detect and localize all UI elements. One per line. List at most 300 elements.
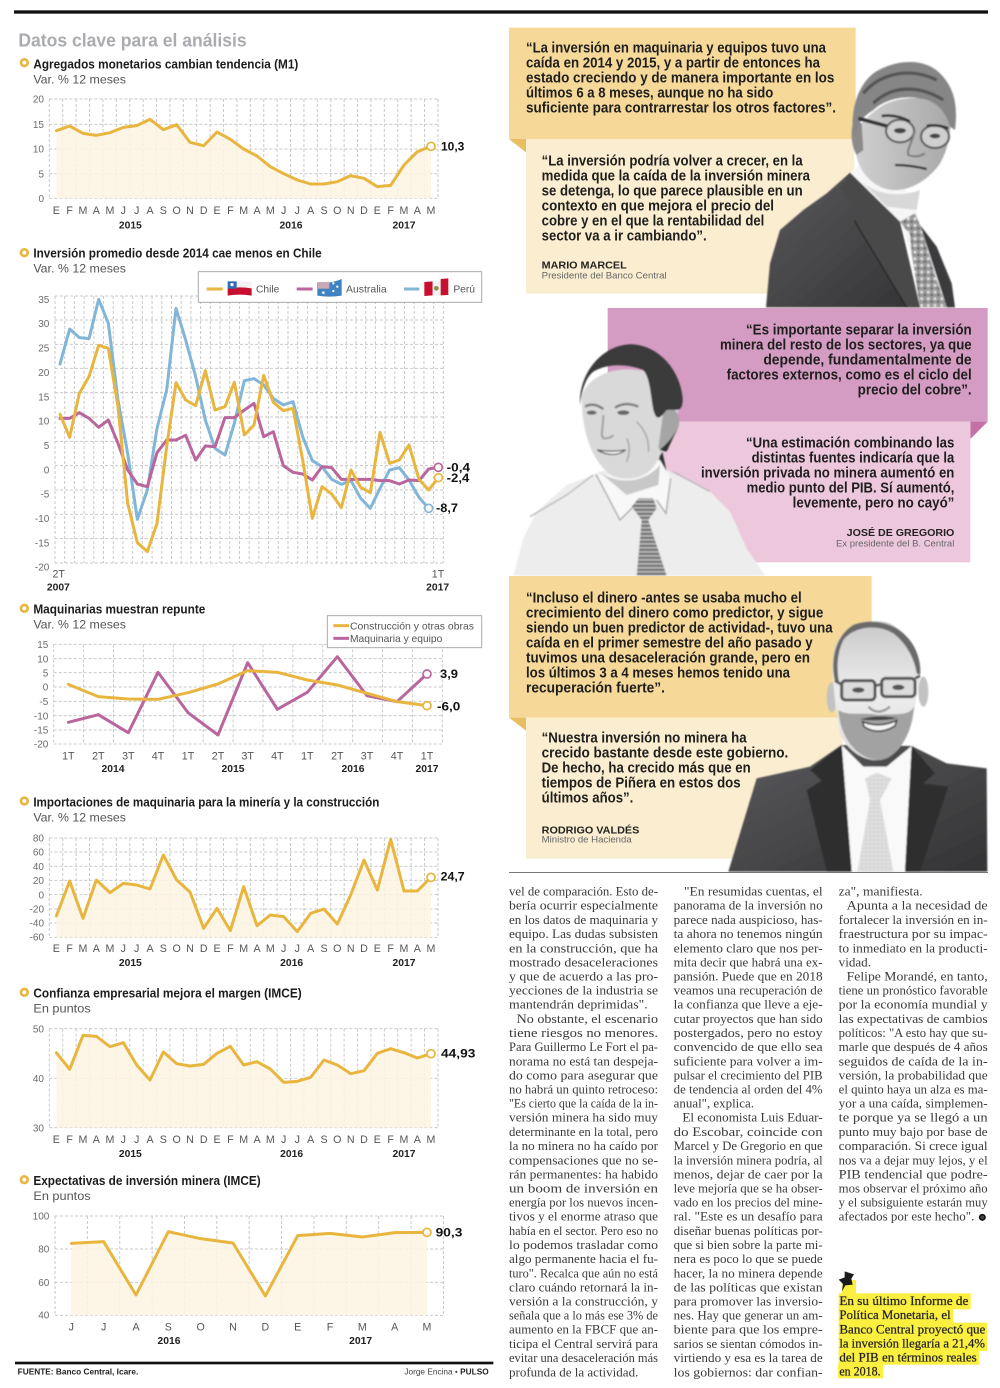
quote two: cobre y en el que la rentabilidad del bbox=[542, 214, 764, 230]
text column two: cutar proyectos que han sido bbox=[674, 1012, 823, 1026]
x axis labels: 4T bbox=[391, 750, 404, 762]
chart bullet bbox=[21, 59, 28, 66]
y axis labels: -5 bbox=[40, 490, 50, 501]
quote box dark bbox=[608, 308, 988, 422]
text column one: tivos y el enorme atraso que bbox=[509, 1210, 658, 1224]
text column three: vidad. bbox=[839, 955, 871, 969]
chart subtitle: Var. % 12 meses bbox=[33, 811, 126, 825]
text column one: determinante en la total, pero bbox=[509, 1125, 658, 1139]
text column three: nos va a dejar muy lejos, y el bbox=[839, 1153, 988, 1167]
text column three: punto muy bajo por base de bbox=[839, 1125, 988, 1139]
text column two: de las políticas que existan bbox=[674, 1280, 823, 1294]
y axis labels: 30 bbox=[38, 319, 50, 330]
x axis labels: 2T bbox=[212, 750, 225, 762]
y axis labels: 40 bbox=[38, 1311, 50, 1322]
attribution bbox=[836, 526, 955, 549]
y axis labels: -5 bbox=[39, 697, 49, 708]
x axis labels: EFMAMJJASONDEFMAMJJASONDEFMAM bbox=[53, 205, 435, 217]
end marker Australia bbox=[434, 463, 442, 471]
quote two: distintas fuentes indicaría que la bbox=[752, 451, 955, 467]
text column two: veamos una recuperación de bbox=[674, 984, 823, 998]
attribution: JOSÉ DE GREGORIO bbox=[847, 526, 955, 539]
legend key: Perú: Perú bbox=[453, 284, 475, 295]
quote two: “Nuestra inversión no minera ha bbox=[542, 730, 748, 746]
end value Perú: -8,7 bbox=[436, 501, 458, 515]
year labels bbox=[119, 958, 416, 969]
y axis labels: 5 bbox=[44, 441, 50, 452]
note text: En su último Informe de bbox=[839, 1294, 969, 1308]
x axis labels: 1T bbox=[432, 568, 445, 580]
year labels: 2017 bbox=[393, 221, 416, 232]
text column two: hacer, la no minera depende bbox=[674, 1266, 823, 1280]
end value: 24,7 bbox=[441, 870, 465, 884]
quote one bbox=[526, 40, 836, 116]
end-of-article mark bbox=[980, 1215, 985, 1220]
quote one: minera del resto de los sectores, ya que bbox=[720, 337, 972, 353]
text column one: compensaciones que no se- bbox=[509, 1153, 658, 1167]
text column two: que si bien sobre la parte mi- bbox=[674, 1238, 823, 1252]
y axis labels: 10 bbox=[38, 417, 50, 428]
text column one: claro cuándo retornará la in- bbox=[509, 1280, 658, 1294]
text column two: Marcel y De Gregorio en que bbox=[674, 1139, 823, 1153]
text column one: Para Guillermo Le Fort el pa- bbox=[509, 1040, 658, 1054]
area fill bbox=[71, 1232, 427, 1315]
text column three: versión, la probabilidad que bbox=[839, 1068, 988, 1082]
text column three: y el subsiguiente estarán muy bbox=[839, 1196, 988, 1210]
line: Chile bbox=[60, 345, 438, 552]
chart title: Importaciones de maquinaria para la minería y la construcción bbox=[33, 795, 379, 810]
attribution: Ministro de Hacienda bbox=[542, 834, 632, 844]
text column three: Felipe Morandé, en tanto, bbox=[847, 969, 988, 983]
quote one: “Incluso el dinero -antes se usaba mucho el bbox=[526, 591, 802, 607]
quote one: estado creciendo y de manera importante en los bbox=[526, 70, 834, 86]
top rule bbox=[14, 10, 988, 14]
y axis labels: 0 bbox=[38, 890, 44, 901]
legend key: Chile: Chile bbox=[256, 284, 280, 295]
y axis labels: -10 bbox=[35, 514, 50, 525]
panel: José De Gregorio quotes bbox=[608, 308, 988, 562]
text column two: anual", explica. bbox=[674, 1097, 754, 1111]
text column three: el quinto haya un alza es ma- bbox=[839, 1083, 988, 1097]
text column one: energía por los nuevos incen- bbox=[509, 1196, 658, 1210]
main heading: Datos clave para el análisis bbox=[18, 31, 247, 51]
y axis labels: 20 bbox=[33, 95, 44, 106]
quote two: sector va a ir cambiando”. bbox=[542, 229, 707, 245]
y axis labels: 15 bbox=[33, 120, 44, 131]
text column one: y que de acuerdo a las pro- bbox=[509, 969, 658, 983]
chart bullet bbox=[21, 989, 28, 996]
text column three: to inmediato en la producti- bbox=[839, 941, 988, 955]
text column two: parece nada auspicioso, has- bbox=[674, 913, 823, 927]
text column one: algo permanente hacia el fu- bbox=[509, 1252, 658, 1266]
note text: del PIB en términos reales bbox=[839, 1351, 977, 1365]
year labels: 2016 bbox=[280, 221, 303, 232]
chart bullet bbox=[21, 1176, 28, 1183]
quote one: últimos 6 a 8 meses, aunque no ha sido bbox=[526, 85, 774, 101]
year labels: 2017 bbox=[393, 1149, 416, 1160]
fold triangle bbox=[970, 422, 988, 439]
year labels bbox=[102, 764, 439, 775]
text column two: para promover las inversio- bbox=[674, 1295, 823, 1309]
quote two: se detenga, lo que parece plausible en un bbox=[542, 184, 803, 200]
y axis labels: 80 bbox=[33, 833, 44, 844]
text column one: no habrá un quinto retroceso: bbox=[509, 1083, 658, 1097]
quote two: últimos años”. bbox=[542, 790, 633, 806]
year labels: 2014 bbox=[102, 764, 125, 775]
chart subtitle: Var. % 12 meses bbox=[33, 262, 126, 276]
end value: 90,3 bbox=[436, 1226, 463, 1240]
quote two: tiempos de Piñera en estos dos bbox=[542, 775, 741, 791]
quote one: tuvimos una desaceleración grande, pero en bbox=[526, 651, 810, 667]
quote one: caída en 2014 y 2015, y a partir de entonces ha bbox=[526, 55, 821, 71]
chart: inversión promedio bbox=[21, 245, 482, 594]
x axis labels: 2T bbox=[331, 750, 344, 762]
chart bullet bbox=[21, 605, 28, 612]
x axis labels: 2T bbox=[52, 568, 65, 580]
x axis labels bbox=[47, 568, 449, 594]
quote two: contexto en que mejora el precio del bbox=[542, 199, 774, 215]
x axis labels: 4T bbox=[271, 750, 284, 762]
end marker Chile bbox=[434, 474, 442, 482]
quote two bbox=[542, 154, 811, 245]
data line bbox=[56, 1035, 431, 1082]
attribution: Presidente del Banco Central bbox=[542, 270, 667, 280]
text column one: en los datos de maquinaria y bbox=[509, 913, 659, 927]
text column two: de tendencia al orden del 4% bbox=[674, 1083, 823, 1097]
y axis labels: 100 bbox=[33, 1212, 50, 1223]
text column one: versión minera ha sido muy bbox=[509, 1111, 659, 1125]
end marker bbox=[423, 1228, 431, 1236]
quote box light bbox=[657, 422, 970, 562]
x axis labels: 3T bbox=[241, 750, 254, 762]
line: Perú bbox=[60, 299, 429, 519]
text column two: suficiente para volver a im- bbox=[674, 1054, 823, 1068]
x axis labels: 2017 bbox=[426, 583, 449, 594]
quote one bbox=[526, 591, 834, 697]
y axis labels: -20 bbox=[30, 905, 44, 916]
text column three: por la economía mundial y bbox=[839, 998, 988, 1012]
quote two: “La inversión podría volver a crecer, en la bbox=[542, 154, 804, 170]
quote one: “La inversión en maquinaria y equipos tuvo una bbox=[526, 40, 827, 56]
portrait: José De Gregorio bbox=[513, 344, 765, 576]
footer bbox=[15, 1362, 493, 1376]
text column three: Apunta a la necesidad de bbox=[847, 899, 988, 913]
y axis labels: 0 bbox=[44, 465, 50, 476]
y axis labels: 10 bbox=[37, 654, 49, 665]
credit: Jorge Encina • PULSO bbox=[404, 1366, 489, 1376]
text column one: un boom de inversión en bbox=[509, 1181, 659, 1195]
y axis labels: 30 bbox=[33, 1123, 44, 1134]
text column one: turo". Recalca que aún no está bbox=[509, 1266, 658, 1280]
text column three: yor a una caída, simplemen- bbox=[839, 1097, 988, 1111]
chart title: Agregados monetarios cambian tendencia (M1) bbox=[33, 56, 298, 71]
y axis labels: -10 bbox=[34, 711, 49, 722]
y axis labels: 80 bbox=[38, 1245, 50, 1256]
x axis labels: 1T bbox=[182, 750, 195, 762]
data line bbox=[56, 839, 431, 932]
text column one: en la construcción, que ha bbox=[509, 941, 658, 955]
icon: push pin bbox=[839, 1271, 854, 1291]
x axis labels: 2T bbox=[92, 750, 105, 762]
text column three: seguidos de caída de la in- bbox=[839, 1054, 988, 1068]
text column three: afectados por este hecho". bbox=[839, 1210, 974, 1224]
text column one: mantendrán deprimidas". bbox=[509, 998, 648, 1012]
quote two: “Una estimación combinando las bbox=[746, 436, 954, 452]
attribution bbox=[542, 823, 640, 844]
text column three: políticos: "A esto hay que su- bbox=[839, 1026, 988, 1040]
y axis labels: -60 bbox=[30, 933, 44, 944]
text column three: za", manifiesta. bbox=[839, 885, 923, 899]
area fill bbox=[56, 119, 431, 198]
text column three: PIB tendencial que podre- bbox=[839, 1167, 988, 1181]
quote one: depende, fundamentalmente de bbox=[763, 352, 972, 368]
text column two: elemento claro que nos per- bbox=[674, 941, 823, 955]
text column one: mostrado desaceleraciones bbox=[509, 955, 658, 969]
y axis labels: 10 bbox=[33, 145, 44, 156]
quote two: levemente, pero no cayó” bbox=[793, 496, 954, 512]
quote one: “Es importante separar la inversión bbox=[746, 322, 972, 338]
end marker bbox=[427, 1050, 435, 1058]
y axis labels: 50 bbox=[33, 1024, 44, 1035]
text column two: biente para que los empre- bbox=[674, 1323, 823, 1337]
text column three: fraestructura por su impac- bbox=[839, 927, 988, 941]
text column three bbox=[839, 885, 988, 1224]
text column one: do como para asegurar que bbox=[509, 1068, 658, 1082]
legend key: Perú bbox=[404, 278, 475, 296]
x axis labels: 4T bbox=[152, 750, 165, 762]
chart title: Confianza empresarial mejora el margen (IMCE) bbox=[33, 985, 302, 1000]
divider above article bbox=[509, 872, 988, 873]
chart: confianza empresarial bbox=[21, 985, 476, 1160]
y axis labels: 40 bbox=[33, 1074, 44, 1085]
quote box dark bbox=[509, 576, 872, 718]
text column one: lo podemos trasladar como bbox=[509, 1238, 658, 1252]
text column two: convencido de que ello sea bbox=[674, 1040, 823, 1054]
quote one: factores externos, como es el ciclo del bbox=[727, 367, 972, 383]
chart title: Maquinarias muestran repunte bbox=[33, 601, 205, 616]
text column one: señala que a lo más ese 3% de bbox=[509, 1309, 658, 1323]
text column two: mita decir que habrá una ex- bbox=[674, 955, 823, 969]
text column one: aumento en la FBCF que an- bbox=[509, 1323, 658, 1337]
text column one: versión a la construcción, y bbox=[509, 1295, 659, 1309]
line: maquinaria y equipo bbox=[68, 657, 427, 735]
text column two: pansión. Puede que en 2018 bbox=[674, 969, 823, 983]
x axis labels: JJASONDEFMAM bbox=[69, 1322, 431, 1334]
text column one: profunda de la actividad. bbox=[509, 1365, 638, 1379]
note text: Política Monetaria, el bbox=[839, 1308, 951, 1322]
text column two: pulsar el crecimiento del PIB bbox=[674, 1068, 823, 1082]
y axis labels bbox=[30, 833, 44, 944]
end marker bbox=[427, 142, 435, 150]
end value: 44,93 bbox=[441, 1047, 476, 1061]
attribution: MARIO MARCEL bbox=[542, 260, 627, 271]
text column two: vado en los precios del mine- bbox=[674, 1196, 823, 1210]
text column one: yecciones de la industria se bbox=[509, 984, 658, 998]
x axis labels: 1T bbox=[62, 750, 75, 762]
end value Australia: -0,4 bbox=[447, 461, 470, 475]
text column two: panorama de la inversión no bbox=[674, 899, 823, 913]
end value construcción: -6,0 bbox=[437, 700, 461, 714]
source note: FUENTE: Banco Central, Icare. bbox=[18, 1366, 138, 1376]
year labels: 2017 bbox=[416, 764, 439, 775]
note text: la inversión llegaría a 21,4% bbox=[839, 1336, 985, 1350]
legend: Maquinaria y equipo bbox=[350, 634, 443, 645]
text column two: nes. Hay que generar un am- bbox=[674, 1309, 823, 1323]
chart subtitle: En puntos bbox=[33, 1001, 91, 1015]
callout: highlighted note bbox=[838, 1271, 987, 1379]
text column three: mos observar el próximo año bbox=[839, 1181, 988, 1195]
text column two: sarios se sientan cómodos in- bbox=[674, 1337, 823, 1351]
y axis labels bbox=[33, 95, 44, 205]
y axis labels: 35 bbox=[38, 295, 50, 306]
text column three: fortalecer la inversión en in- bbox=[839, 913, 988, 927]
attribution: RODRIGO VALDÉS bbox=[542, 823, 640, 836]
x axis labels: 3T bbox=[361, 750, 374, 762]
text column two: la inversión minera podría, al bbox=[674, 1153, 823, 1167]
x axis labels: 3T bbox=[122, 750, 135, 762]
chart subtitle: En puntos bbox=[33, 1189, 91, 1203]
y axis labels: -20 bbox=[35, 563, 50, 574]
y axis labels: 20 bbox=[33, 876, 44, 887]
end value: 10,3 bbox=[441, 140, 465, 154]
text column one: norama no está tan despeja- bbox=[509, 1054, 658, 1068]
y axis labels: 60 bbox=[33, 848, 44, 859]
text column three: comparación. Si crece igual bbox=[839, 1139, 988, 1153]
text column two: leve mejoría que se ha obser- bbox=[674, 1181, 823, 1195]
quote box light bbox=[526, 718, 843, 859]
text column two: El economista Luis Eduar- bbox=[682, 1111, 823, 1125]
y axis labels bbox=[33, 1024, 44, 1134]
text column two: do Escobar, coincide con bbox=[674, 1125, 823, 1139]
portrait: Mario Marcel bbox=[766, 62, 956, 307]
line: construcción y otras obras bbox=[68, 671, 427, 706]
year labels: 2015 bbox=[119, 958, 142, 969]
y axis labels: 0 bbox=[43, 683, 49, 694]
text column one: evitar una desaceleración más bbox=[509, 1351, 658, 1365]
attribution: Ex presidente del B. Central bbox=[836, 539, 954, 549]
year labels: 2015 bbox=[119, 221, 142, 232]
chart: maquinarias bbox=[21, 601, 482, 775]
text column one: No obstante, el escenario bbox=[517, 1012, 658, 1026]
quote one: caída en el primer semestre del año pasado y bbox=[526, 636, 813, 652]
chart bullet bbox=[21, 798, 28, 804]
quote one: recuperación fuerte”. bbox=[526, 681, 665, 697]
text column one: vel de comparación. Esto de- bbox=[509, 885, 658, 899]
y axis labels: -15 bbox=[34, 726, 49, 737]
end marker Perú bbox=[425, 504, 433, 512]
text column three: te porque ya se llegó a un bbox=[839, 1111, 988, 1125]
text column one: equipo. Las dudas subsisten bbox=[509, 927, 659, 941]
text column two: diseñar buenas políticas por- bbox=[674, 1224, 823, 1238]
y axis labels: 40 bbox=[33, 862, 44, 873]
year labels: 2017 bbox=[349, 1336, 372, 1347]
chart subtitle: Var. % 12 meses bbox=[33, 72, 126, 86]
quote two: inversión privada no minera aumentó en bbox=[701, 466, 954, 482]
quote two: medida que la caída de la inversión minera bbox=[542, 169, 811, 185]
quote one bbox=[720, 322, 972, 398]
year labels: 2017 bbox=[393, 958, 416, 969]
quote one: precio del cobre”. bbox=[858, 382, 972, 398]
chart: importaciones de maquinaria bbox=[21, 795, 465, 969]
text column one: tiene riesgos no menores. bbox=[509, 1026, 658, 1040]
text column two bbox=[674, 885, 823, 1379]
y axis labels bbox=[34, 640, 49, 751]
chart title: Expectativas de inversión minera (IMCE) bbox=[33, 1173, 261, 1188]
text column one: bería ocurrir especialmente bbox=[509, 899, 658, 913]
quote box light bbox=[526, 139, 854, 294]
legend bbox=[327, 616, 482, 648]
y axis labels: 5 bbox=[38, 169, 44, 180]
quote two: De hecho, ha crecido más que en bbox=[542, 760, 751, 776]
y axis labels: -15 bbox=[35, 538, 50, 549]
panel: Rodrigo Valdés quotes bbox=[509, 576, 872, 859]
data line bbox=[56, 119, 431, 187]
quote box dark bbox=[509, 28, 856, 139]
attribution bbox=[542, 260, 667, 280]
chart: expectativas de inversión minera bbox=[21, 1173, 463, 1347]
y axis labels: 20 bbox=[38, 368, 50, 379]
text column three: las expectativas de cambios bbox=[839, 1012, 988, 1026]
text column two: menos, dejar de caer por la bbox=[674, 1167, 823, 1181]
quote two: crecido bastante desde este gobierno. bbox=[542, 745, 788, 761]
end marker maquinaria bbox=[423, 670, 431, 678]
y axis labels bbox=[35, 295, 50, 574]
fold triangle bbox=[509, 139, 526, 152]
year labels bbox=[158, 1336, 372, 1347]
text column three: marle que después de 4 años bbox=[839, 1040, 988, 1054]
text column one bbox=[509, 885, 659, 1379]
year labels: 2016 bbox=[158, 1336, 181, 1347]
text column one: había en el sector. Pero eso no bbox=[509, 1224, 658, 1238]
y axis labels: 15 bbox=[38, 392, 50, 403]
x axis labels: 2007 bbox=[47, 583, 70, 594]
chart title: Inversión promedio desde 2014 cae menos en Chile bbox=[33, 245, 322, 260]
quote one: suficiente para contrarrestar los otros factores”. bbox=[526, 100, 836, 116]
x axis labels bbox=[62, 750, 434, 762]
y axis labels: -40 bbox=[30, 919, 44, 930]
x axis labels: 1T bbox=[301, 750, 314, 762]
legend bbox=[198, 272, 482, 302]
note text: Banco Central proyectó que bbox=[839, 1322, 986, 1336]
note text: en 2018. bbox=[839, 1365, 881, 1379]
chart subtitle: Var. % 12 meses bbox=[33, 617, 126, 631]
highlight bands bbox=[838, 1280, 987, 1378]
quote one: siendo un buen predictor de actividad-, tuvo una bbox=[526, 621, 834, 637]
text column two: virtiendo y esa es la tarea de bbox=[674, 1351, 823, 1365]
text column two: los gobiernos: dar confian- bbox=[674, 1365, 823, 1379]
legend: Construcción y otras obras bbox=[350, 621, 474, 632]
chart: agregados monetarios M1 bbox=[21, 56, 465, 232]
end marker bbox=[427, 873, 435, 881]
x axis labels: 1T bbox=[421, 750, 434, 762]
quote one: crecimiento del dinero como predictor, y sigue bbox=[526, 606, 823, 622]
year labels bbox=[119, 1149, 416, 1160]
y axis labels: 25 bbox=[38, 343, 50, 354]
note text bbox=[839, 1294, 986, 1379]
year labels bbox=[119, 221, 416, 232]
text column two: nera es poco lo que se puede bbox=[674, 1252, 823, 1266]
x axis labels: EFMAMJJASONDEFMAMJJASONDEFMAM bbox=[53, 1134, 435, 1146]
legend key: Australia: Australia bbox=[346, 284, 387, 295]
y axis labels: 5 bbox=[43, 668, 49, 679]
data line bbox=[71, 1232, 427, 1296]
quote one: los últimos 3 a 4 meses hemos tenido una bbox=[526, 666, 791, 682]
text column two: ral. "Este es un desafío para bbox=[674, 1210, 823, 1224]
year labels: 2015 bbox=[119, 1149, 142, 1160]
end value maquinaria: 3,9 bbox=[440, 667, 458, 681]
area fill bbox=[56, 1035, 431, 1128]
text column two: "En resumidas cuentas, el bbox=[684, 885, 823, 899]
